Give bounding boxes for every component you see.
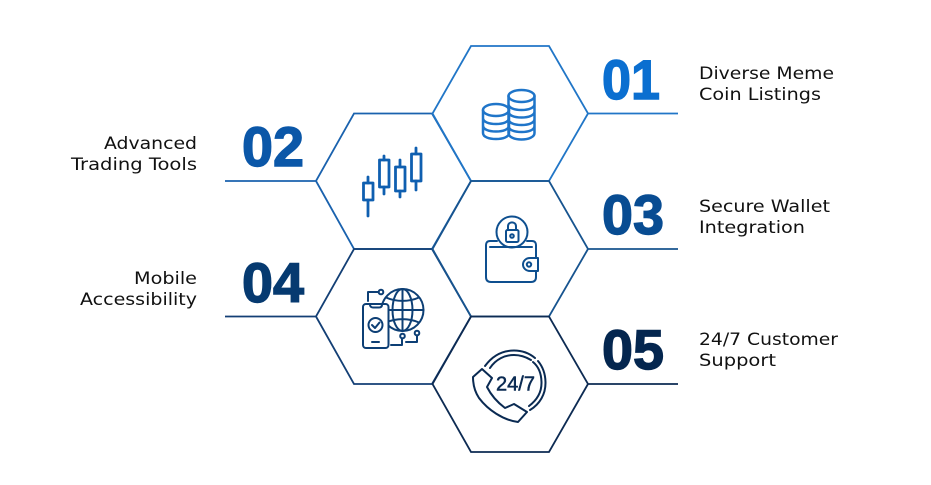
label: Mobile Accessibility: Mobile	[134, 269, 197, 288]
number 02: 02	[242, 115, 304, 178]
label: 24/7 Customer Support: 24/7 Customer	[699, 330, 838, 349]
hexagon: advanced trading tools	[225, 114, 471, 249]
label: Diverse Meme Coin Listings: Coin Listings	[699, 85, 821, 104]
icon: 24/7 phone support	[473, 350, 546, 422]
icon: wallet with lock	[486, 216, 538, 282]
number 03: 03	[602, 183, 664, 246]
label: Secure Wallet Integration: Integration	[699, 218, 805, 237]
hexagon: diverse meme coin listings	[432, 46, 678, 181]
text: 24/7: 24/7	[496, 374, 535, 396]
label: Secure Wallet Integration	[699, 197, 831, 237]
label: Advanced Trading Tools: Advanced	[104, 134, 197, 153]
hexagon: mobile accessibility	[225, 249, 471, 384]
icon: candlestick chart	[364, 148, 421, 216]
label: Mobile Accessibility	[80, 269, 197, 309]
number 01: 01	[602, 48, 660, 111]
label: 24/7 Customer Support	[699, 330, 838, 370]
hexagon: customer support	[432, 316, 678, 452]
label: Mobile Accessibility: Accessibility	[80, 290, 197, 309]
label: Diverse Meme Coin Listings: Diverse Meme	[699, 64, 834, 83]
hexagon: secure wallet integration	[432, 181, 678, 316]
label: Diverse Meme Coin Listings	[699, 64, 834, 104]
label: Secure Wallet Integration: Secure Wallet	[699, 197, 831, 216]
label: 24/7 Customer Support: Support	[699, 351, 777, 370]
number 05: 05	[602, 318, 664, 381]
icon: phone and globe	[363, 289, 424, 348]
label: Advanced Trading Tools	[70, 134, 197, 174]
icon: coin stacks	[483, 90, 534, 140]
number 04: 04	[242, 251, 304, 314]
label: Advanced Trading Tools: Trading Tools	[70, 155, 197, 174]
